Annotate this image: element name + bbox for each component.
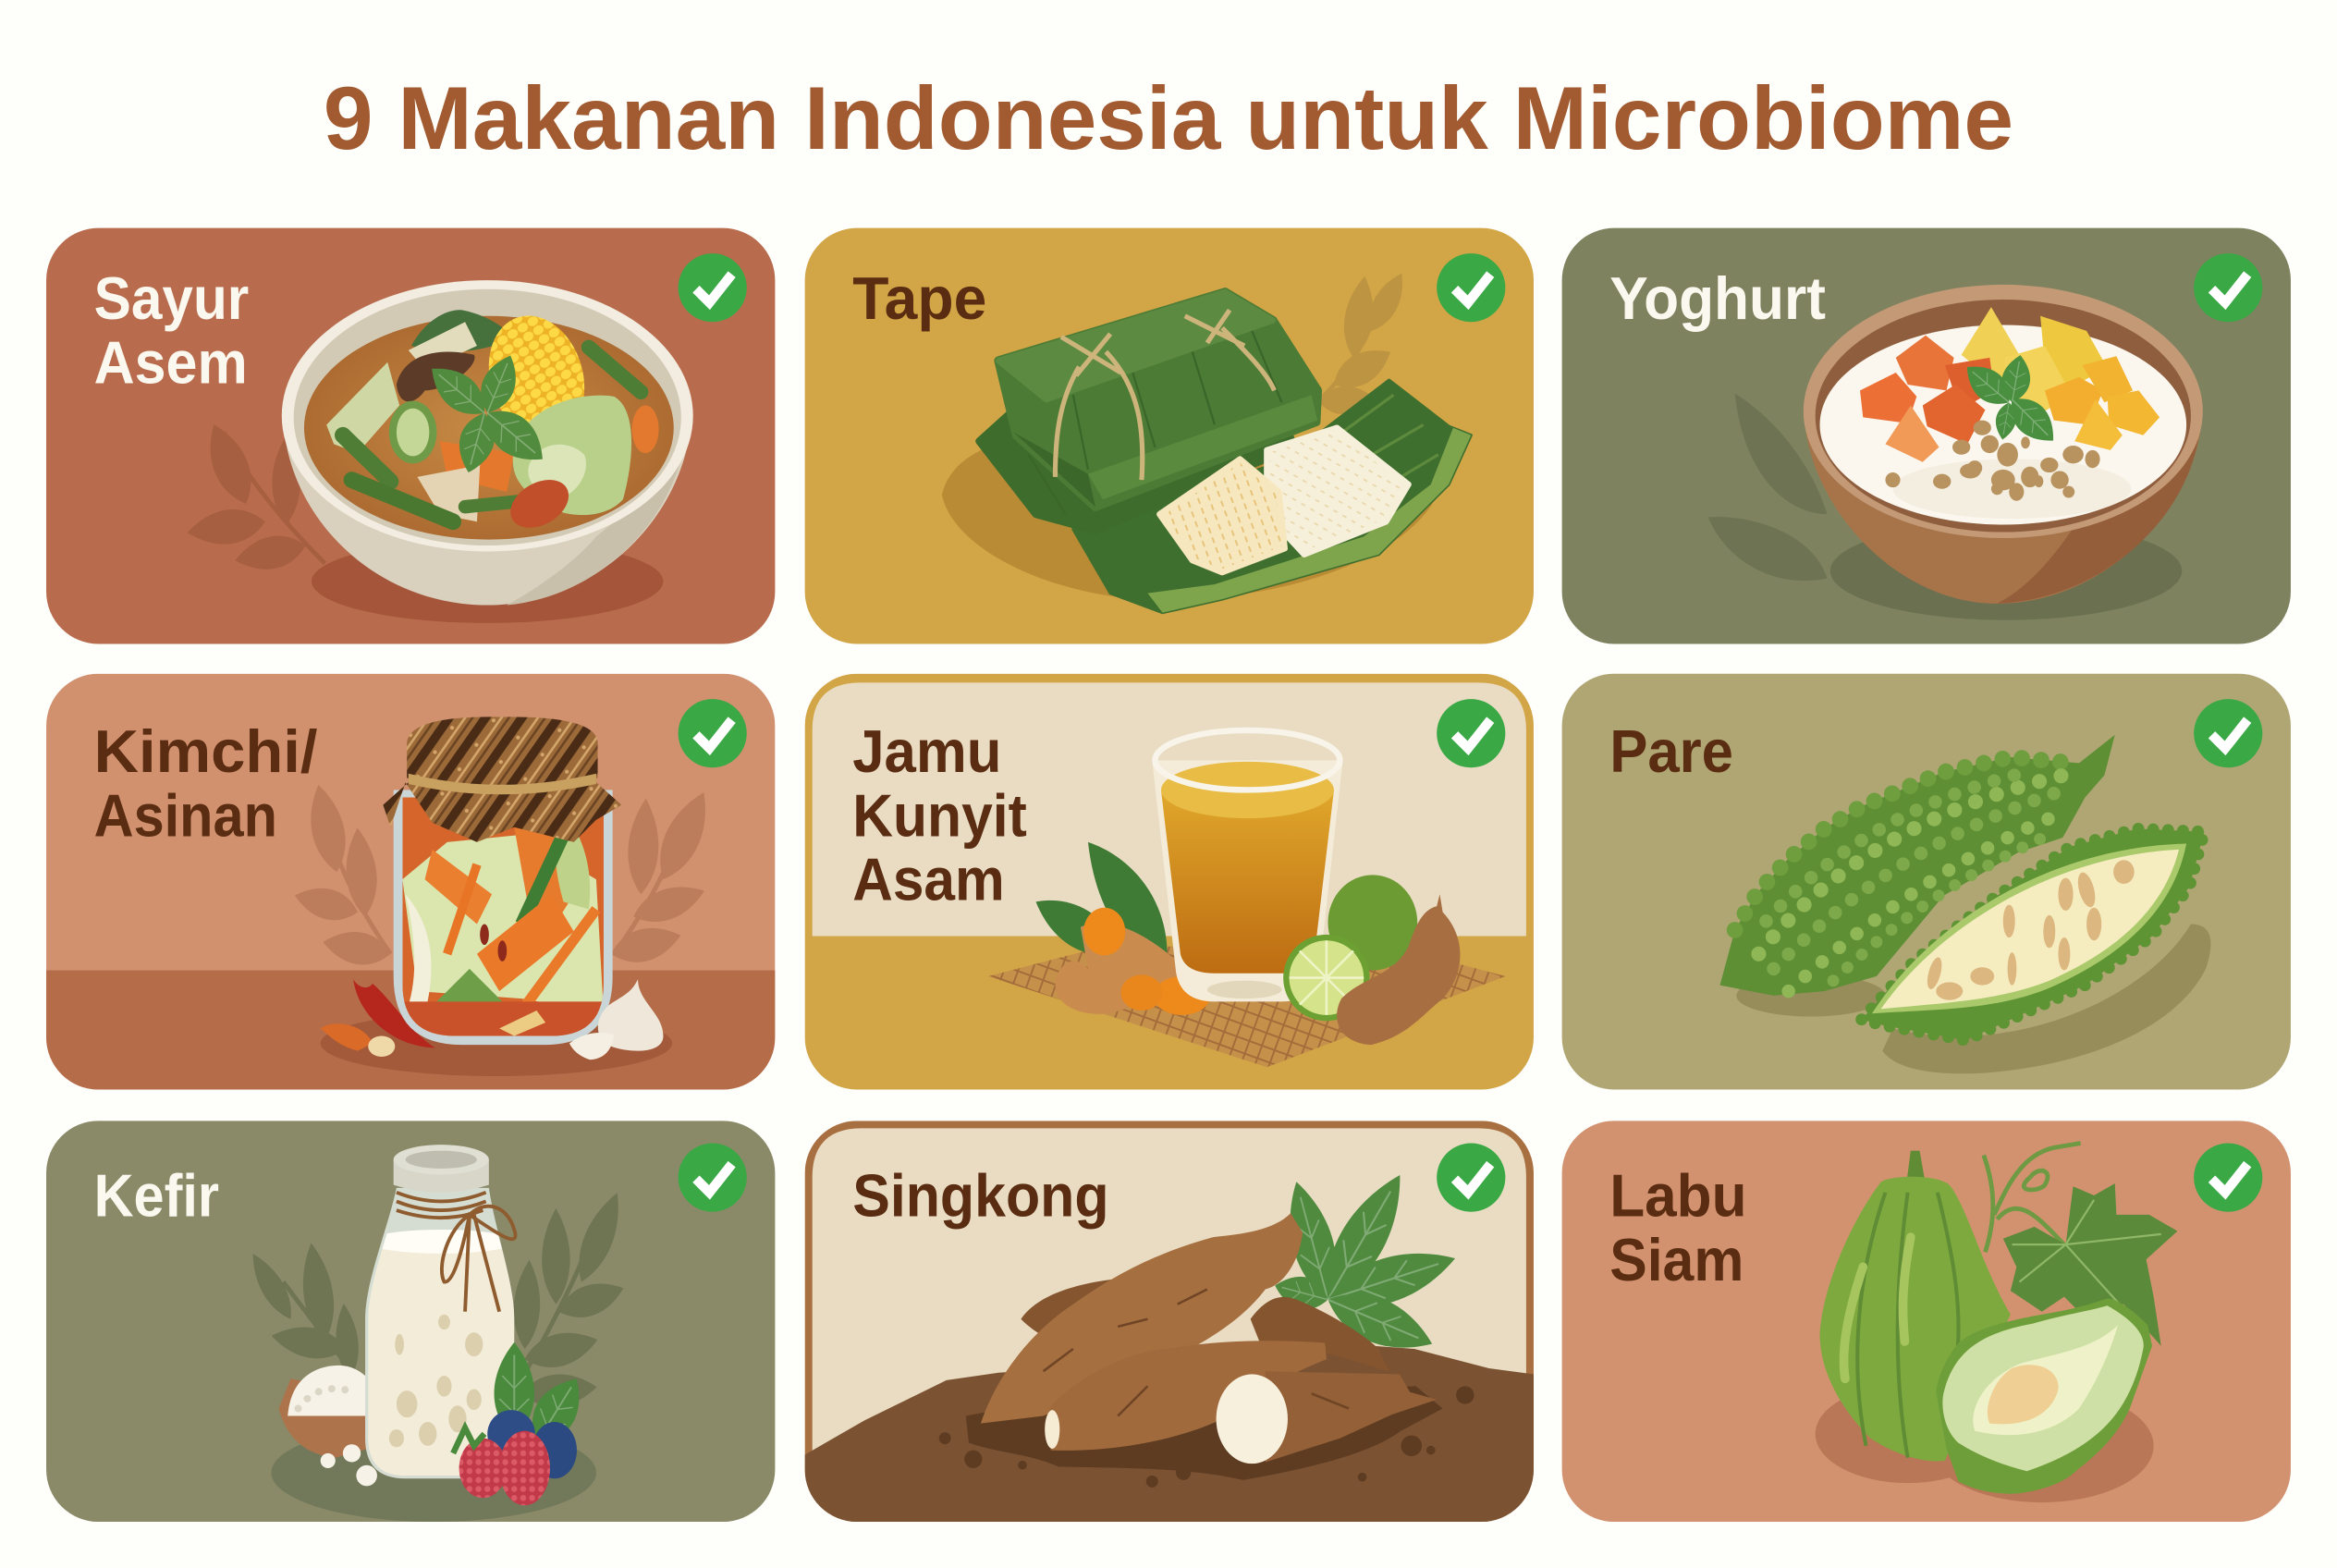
label: Siam <box>1609 1227 1744 1293</box>
label: Tape <box>852 265 986 332</box>
panel: Labu Siam <box>1562 1121 2291 1522</box>
garlic <box>569 979 663 1060</box>
glass of jamu <box>1152 730 1343 1001</box>
label <box>94 718 318 849</box>
tendril <box>1984 1144 2081 1252</box>
banana leaf <box>1073 380 1471 613</box>
whole chayote <box>1820 1151 2011 1461</box>
twine bow <box>397 1193 516 1312</box>
label: Kefir <box>94 1163 219 1230</box>
label: Kunyit <box>852 782 1027 849</box>
check badge <box>679 1144 747 1212</box>
decorative leaves <box>185 418 325 576</box>
label: Kimchi/ <box>94 718 318 785</box>
cassava leaves <box>1271 1164 1462 1365</box>
check badge <box>1437 699 1505 767</box>
decorative leaves <box>1315 268 1413 416</box>
chayote leaf <box>2003 1183 2177 1346</box>
leaves <box>1036 842 1168 962</box>
card background <box>1562 1121 2291 1522</box>
turmeric <box>1055 908 1210 1015</box>
label: Asam <box>852 847 1005 913</box>
panel: Pare <box>1562 674 2291 1089</box>
card background with table band <box>46 674 775 1089</box>
kefir bottle <box>365 1145 521 1483</box>
shadow <box>271 1424 596 1522</box>
label: Singkong <box>852 1163 1109 1230</box>
label: Yoghurt <box>1609 265 1826 332</box>
shadow <box>1830 521 2182 620</box>
label <box>1609 1163 1747 1293</box>
panel: Tape <box>805 228 1534 643</box>
panel: Jamu Kunyit Asam <box>805 674 1534 1089</box>
bowl <box>282 280 693 606</box>
check badge <box>2194 253 2262 322</box>
label: Labu <box>1609 1163 1747 1230</box>
card background <box>805 1121 1534 1522</box>
label: Sayur <box>94 265 249 332</box>
shadow <box>321 1011 672 1076</box>
lime <box>1283 875 1417 1021</box>
check badge <box>1437 253 1505 322</box>
check badge <box>679 253 747 322</box>
fruit and granola <box>1860 307 2160 501</box>
title: 9 Makanan Indonesia untuk Microbiome <box>324 68 2013 168</box>
label: Jamu <box>852 718 1001 785</box>
wrapped packets <box>979 292 1317 531</box>
halved chayote <box>1936 1298 2152 1494</box>
jar <box>394 790 613 1045</box>
label <box>852 718 1027 913</box>
card background with wall <box>805 674 1534 1089</box>
decorative leaves <box>243 1187 630 1410</box>
label: Asem <box>94 329 248 396</box>
bowl of kefir grains <box>279 1366 377 1486</box>
berries and leaves <box>453 1342 593 1505</box>
decorative leaves <box>291 781 719 970</box>
card background <box>1562 674 2291 1089</box>
plate shadow <box>312 540 663 623</box>
panel: Kimchi/Asinan <box>46 674 775 1089</box>
bowl <box>1804 285 2203 604</box>
soil <box>805 1341 1534 1522</box>
panel: Kefir <box>46 1121 775 1522</box>
batik cloth lid <box>383 717 621 842</box>
card background <box>46 1121 775 1522</box>
soil clods <box>939 1386 1474 1488</box>
shadow <box>1816 1385 2154 1502</box>
panel: Singkong <box>805 1121 1534 1522</box>
check badge <box>2194 699 2262 767</box>
check badge <box>679 699 747 767</box>
tape pieces <box>1159 428 1409 572</box>
label <box>94 265 249 396</box>
soup vegetables <box>326 304 659 537</box>
panel: Yoghurt <box>1562 228 2291 643</box>
card background <box>46 228 775 643</box>
whole bitter gourd <box>1720 735 2115 996</box>
check badge <box>1437 1144 1505 1212</box>
cut bitter gourd <box>1862 828 2204 1040</box>
label: Pare <box>1609 718 1733 785</box>
card background <box>805 228 1534 643</box>
panel: Sayur Asem <box>46 228 775 643</box>
label: Asinan <box>94 782 277 849</box>
shadows <box>1736 925 2210 1073</box>
decorative leaves <box>1708 394 1828 581</box>
shadow <box>942 431 1444 600</box>
cassava roots <box>966 1213 1443 1480</box>
card background <box>1562 228 2291 643</box>
tamarind pod <box>1337 894 1460 1045</box>
woven mat <box>988 947 1505 1067</box>
check badge <box>2194 1144 2262 1212</box>
chili peppers <box>321 979 435 1057</box>
